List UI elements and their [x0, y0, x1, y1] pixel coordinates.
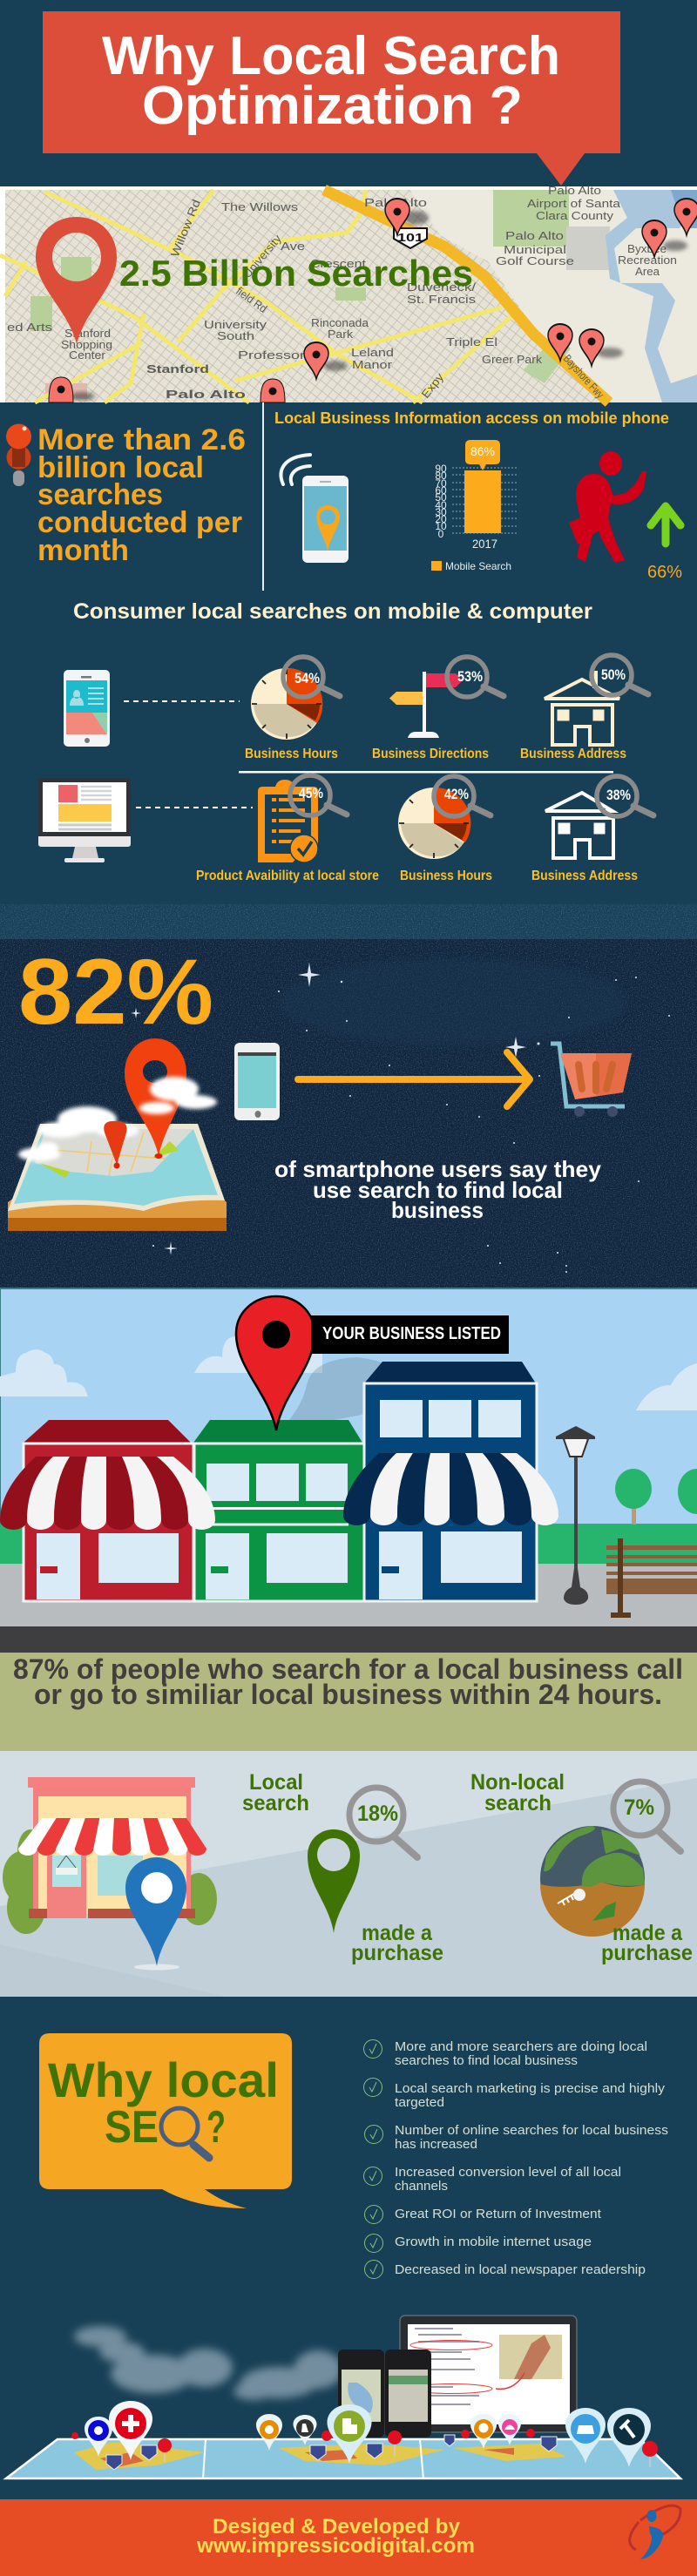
panel: consumer local searches: 53% — [457, 668, 483, 685]
map place labels: Greer Park — [482, 353, 543, 366]
map place labels: University — [204, 318, 267, 331]
highway shield 101: 101 — [397, 231, 423, 244]
panel: 87% statistic: 87% of people who search for a local business call — [13, 1653, 683, 1685]
footer — [0, 2499, 697, 2576]
label: your business listed: YOUR BUSINESS LISTED — [322, 1324, 501, 1343]
panel: 87% statistic: or go to similiar local business within 24 hours. — [34, 1679, 662, 1710]
non-local search label: Non-local — [470, 1770, 565, 1795]
map place labels: Palo Alto — [166, 388, 246, 401]
checklist: has increased — [395, 2137, 477, 2152]
bar chart: 80 — [435, 470, 447, 482]
map place labels: Professor — [238, 348, 306, 362]
legend: Mobile Search — [445, 560, 511, 572]
logo — [630, 2505, 680, 2559]
statistic text: searches — [37, 478, 163, 511]
icon: phone — [234, 1043, 280, 1120]
red ball pins — [71, 2429, 658, 2467]
small map pins — [49, 199, 697, 402]
icon: shopping cart — [551, 1044, 632, 1117]
checklist: searches to find local business — [395, 2053, 578, 2068]
icon: direction signpost — [389, 672, 463, 738]
66% stat: 66% — [647, 563, 682, 582]
map place labels: Manor — [352, 358, 393, 371]
checklist: More and more searchers are doing local — [395, 2039, 647, 2054]
magnifier — [447, 657, 504, 697]
icon: person with phone — [569, 451, 646, 563]
heading: Local Business Information access on mobile phone — [274, 409, 669, 427]
blue awning — [343, 1453, 558, 1525]
map place labels: Airport of Santa — [527, 197, 621, 210]
map place labels: Byxbee — [627, 242, 667, 255]
map place labels: Crescent — [310, 257, 366, 270]
speech bubble: why local seo: ? — [206, 2102, 226, 2153]
map place labels: Palo Alto — [505, 229, 564, 242]
shields — [106, 2435, 557, 2470]
panel: consumer local searches: 50% — [601, 666, 626, 683]
local search label: search — [242, 1791, 309, 1815]
checklist: channels — [395, 2179, 448, 2194]
magnifier — [592, 655, 648, 695]
checklist: Great ROI or Return of Investment — [395, 2207, 602, 2221]
magnifier — [283, 657, 340, 697]
checklist: Increased conversion level of all local — [395, 2165, 621, 2180]
phones — [338, 2350, 431, 2437]
icon: monitor — [38, 778, 131, 862]
magnifier 18% — [349, 1788, 417, 1857]
map place labels: Ave — [281, 240, 305, 253]
bar chart — [431, 440, 518, 572]
bar chart: 70 — [435, 477, 447, 490]
map place labels: field Rd — [233, 284, 269, 315]
speech bubble: why local seo: SE — [105, 2102, 159, 2153]
icon: house white — [545, 793, 613, 858]
panel: consumer local searches: 42% — [444, 786, 469, 802]
map place labels — [7, 184, 677, 401]
purchase label: purchase — [351, 1941, 443, 1965]
panel: consumer local searches: Business Directions — [372, 747, 489, 761]
awning — [18, 1818, 206, 1856]
caption — [274, 1156, 602, 1223]
map place labels: Clara County — [536, 209, 614, 222]
map place labels: Leland — [351, 346, 394, 359]
large location pin — [36, 217, 117, 344]
map place labels: ed Arts — [7, 321, 53, 334]
map place labels: Shopping — [61, 338, 112, 351]
bar chart: 20 — [435, 513, 447, 525]
panel: local vs non-local — [0, 1751, 697, 1997]
checklist: Number of online searches for local business — [395, 2123, 668, 2138]
street map panel — [0, 184, 697, 402]
non-local search label: search — [484, 1791, 552, 1815]
illustration: devices on world map — [6, 2316, 680, 2479]
magnifier 18%: 18% — [357, 1802, 398, 1826]
map place labels: South — [217, 329, 254, 342]
arrow — [298, 1052, 530, 1106]
local search label — [242, 1770, 309, 1815]
illustration: map with pins — [8, 1038, 227, 1231]
map place labels: Rinconada — [311, 316, 369, 329]
pin shadow — [279, 1357, 401, 1430]
82%: 82% — [18, 939, 213, 1044]
panel: storefront scene — [0, 1288, 697, 1653]
panel: consumer local searches: 54% — [294, 670, 320, 686]
statistic text — [37, 423, 246, 567]
map place labels: Center — [69, 348, 106, 362]
clouds — [0, 1336, 697, 1410]
map place labels: Expy — [419, 370, 446, 401]
icon: globe — [540, 1826, 645, 1937]
map place labels: Bayshore Fwy — [561, 352, 607, 401]
map place labels: Recreation — [618, 254, 677, 267]
panel: consumer local searches: Business Hours — [400, 869, 492, 883]
bar chart: 60 — [435, 484, 447, 497]
illustration: shop front — [3, 1777, 217, 1934]
panel: consumer local searches — [38, 599, 653, 883]
map place labels: St. Francis — [407, 293, 477, 306]
magnifier 7% — [613, 1782, 680, 1851]
map place labels: University — [240, 232, 284, 281]
map place labels: Park — [328, 328, 354, 341]
map place labels: Golf Course — [496, 254, 574, 267]
large location pin — [236, 1296, 315, 1430]
panel: consumer local searches: Business Address — [531, 869, 638, 883]
panel: consumer local searches: Business Address — [520, 747, 626, 761]
bar chart: 0 — [438, 528, 444, 540]
magnifier — [434, 776, 491, 816]
title banner: Optimization ? — [142, 76, 523, 136]
checklist: Local search marketing is precise and highly — [395, 2081, 666, 2096]
map place labels: Area — [635, 265, 660, 278]
magnifier 7%: 7% — [624, 1795, 654, 1820]
icon: phone with pin — [281, 455, 348, 563]
caption: use search to find local — [313, 1177, 563, 1203]
title banner — [43, 11, 620, 186]
highway shield 101 — [394, 228, 427, 248]
speech bubble: why local seo — [39, 2033, 292, 2208]
blue shop — [364, 1362, 537, 1601]
map place labels: Triple El — [446, 335, 497, 348]
checklist — [364, 2039, 668, 2279]
icon: house — [545, 671, 619, 745]
panel: consumer local searches: Business Hours — [245, 747, 338, 761]
checklist: targeted — [395, 2095, 444, 2110]
bar chart: 40 — [435, 499, 447, 511]
purchase label: made a — [612, 1921, 683, 1945]
caption: business — [391, 1197, 484, 1223]
panel: 87% statistic — [0, 1653, 697, 1751]
red awning — [0, 1457, 215, 1530]
statistic text: month — [37, 534, 129, 567]
map place labels: Stanford — [64, 327, 111, 340]
highway — [324, 190, 609, 402]
icon: clipboard — [258, 780, 318, 862]
map headline: 2.5 Billion Searches — [119, 253, 473, 294]
clock: business hours 42% — [398, 788, 470, 859]
map place labels: Stanford — [146, 362, 209, 375]
bar chart: 30 — [435, 506, 447, 518]
statistic text: conducted per — [37, 506, 242, 539]
grass and trees — [0, 1469, 697, 1564]
panel: consumer local searches: Product Avaibility at local store — [196, 869, 379, 883]
bench — [606, 1538, 697, 1618]
label: your business listed — [311, 1315, 509, 1354]
map place labels: Duveneck/ — [407, 281, 476, 294]
map place labels: Willow Rd — [168, 198, 203, 259]
bar chart: 90 — [435, 463, 447, 475]
icon: push pins — [6, 423, 31, 486]
panel: mobile phone access — [274, 409, 682, 582]
map place labels: Municipal — [504, 243, 566, 256]
non-local search label — [470, 1770, 565, 1815]
red shop — [24, 1420, 193, 1601]
checklist: Growth in mobile internet usage — [395, 2235, 592, 2249]
value callout: 86% — [470, 444, 495, 458]
bar chart: 50 — [435, 491, 447, 504]
purchase label: made a — [362, 1921, 433, 1945]
map place labels: Palo Alto — [364, 196, 427, 209]
bar chart: 2017 — [472, 537, 497, 551]
purchase label — [351, 1921, 443, 1965]
magnifier — [290, 775, 347, 815]
purchase label — [601, 1921, 693, 1965]
laptop — [400, 2316, 577, 2432]
map place labels: The Willows — [221, 200, 299, 213]
statistic text: More than 2.6 — [37, 423, 246, 456]
panel: 82% smartphone users — [0, 939, 697, 1288]
map place labels: Palo Alto — [548, 184, 601, 197]
green shop — [193, 1420, 364, 1601]
magnifier — [597, 776, 653, 816]
panel: 2.6 billion searches — [6, 423, 246, 567]
bar chart: 10 — [435, 520, 447, 532]
panel: consumer local searches: 38% — [606, 787, 631, 803]
local search label: Local — [249, 1770, 303, 1795]
footer: Desiged & Developed by — [213, 2515, 461, 2539]
purchase label: purchase — [601, 1941, 693, 1965]
speech bubble: why local seo: Why local — [48, 2052, 279, 2107]
caption: of smartphone users say they — [274, 1156, 602, 1182]
panel: consumer local searches: 45% — [299, 785, 323, 801]
world map strip — [6, 2439, 680, 2479]
clouds — [74, 2326, 342, 2400]
clock: business hours 54% — [251, 668, 322, 740]
checklist: Decreased in local newspaper readership — [395, 2262, 646, 2277]
icon: blue pin — [125, 1857, 186, 1971]
title banner: Why Local Search — [102, 26, 560, 86]
street lamp — [556, 1426, 595, 1605]
icon: green pin — [308, 1829, 360, 1933]
footer: www.impressicodigital.com — [196, 2534, 475, 2558]
icon: green arrow — [651, 506, 680, 544]
category pins — [85, 2401, 651, 2467]
statistic text: billion local — [37, 451, 204, 484]
value callout — [465, 440, 500, 470]
magnifier — [161, 2108, 209, 2158]
heading: Consumer local searches on mobile & computer — [73, 599, 592, 624]
icon: phone — [64, 670, 110, 747]
